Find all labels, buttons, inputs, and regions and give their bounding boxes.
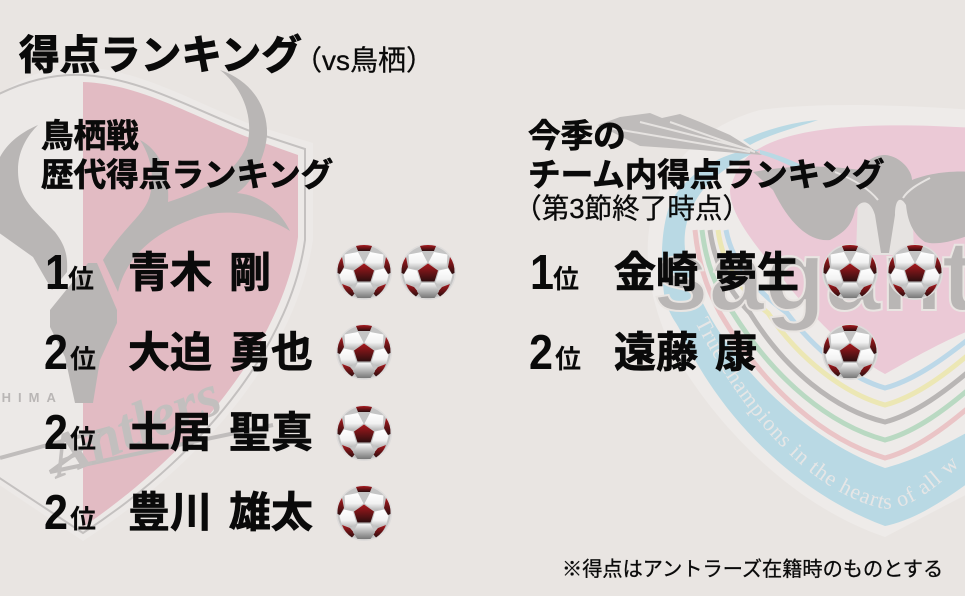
left player 4: 豊川 雄太 — [128, 489, 313, 536]
heading: left: 歴代得点ランキング — [41, 156, 333, 193]
right rank 2: 2 — [529, 326, 553, 380]
right player 1: 金崎 夢生 — [614, 249, 799, 296]
goals: left player 4 — [336, 485, 392, 541]
left rank 3 — [44, 406, 96, 460]
left player 2: 大迫 勇也 — [128, 329, 313, 376]
left rank 2: 2 — [44, 326, 68, 380]
heading: left — [41, 117, 333, 193]
left rank 1: 1 — [45, 246, 69, 300]
right player 2: 遠藤 康 — [614, 329, 757, 376]
title subtitle: （vs鳥栖） — [294, 45, 434, 76]
left rank 1 — [45, 246, 94, 300]
right rank 1: 位 — [553, 264, 579, 294]
left rank 4: 2 — [44, 486, 68, 540]
heading: right: 今季の — [528, 117, 626, 154]
left player 3: 土居 聖真 — [128, 409, 313, 456]
heading note: （第3節終了時点） — [514, 193, 750, 224]
left rank 2 — [44, 326, 96, 380]
heading: right: チーム内得点ランキング — [528, 156, 884, 193]
logo: Antlers shield: Antlers — [34, 361, 230, 492]
left rank 2: 位 — [70, 344, 96, 374]
right rank 2 — [529, 326, 581, 380]
goals: right player 2 — [822, 324, 878, 380]
right rank 1 — [530, 246, 579, 300]
left rank 1: 位 — [68, 264, 94, 294]
goals: left player 2 — [336, 324, 392, 380]
left rank 4: 位 — [70, 504, 96, 534]
left rank 4 — [44, 486, 96, 540]
left rank 3: 位 — [70, 424, 96, 454]
right rank 1: 1 — [530, 246, 554, 300]
title: 得点ランキング — [19, 32, 302, 78]
logo: Antlers shield — [0, 67, 313, 541]
heading: right — [528, 117, 884, 193]
logo: Sagan Tosu crest — [598, 113, 965, 526]
left player 1: 青木 剛 — [128, 249, 271, 296]
right rank 2: 位 — [555, 344, 581, 374]
goals: left player 1 — [336, 244, 456, 300]
heading: left: 鳥栖戦 — [41, 117, 139, 154]
logo: Sagan Tosu crest: True champions in the hearts of all w — [696, 316, 956, 509]
goals: left player 3 — [336, 405, 392, 461]
goals: right player 1 — [822, 244, 943, 300]
footnote: ※得点はアントラーズ在籍時のものとする — [562, 559, 943, 581]
left rank 3: 2 — [44, 406, 68, 460]
